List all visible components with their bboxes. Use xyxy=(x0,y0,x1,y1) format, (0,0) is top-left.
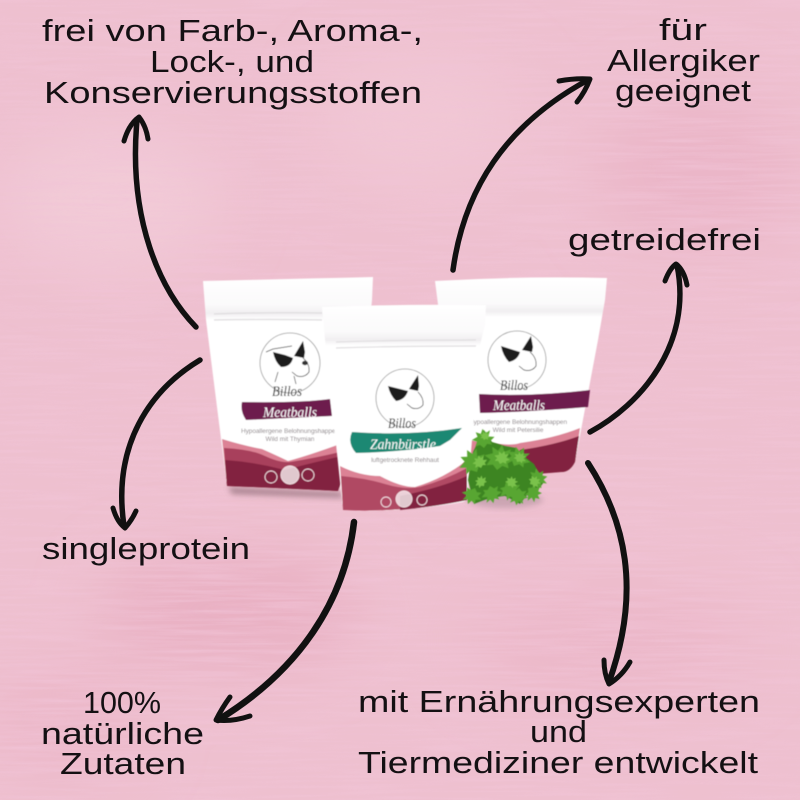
bottom colour band xyxy=(222,439,343,491)
text: frei von Farb-, Aroma-, Lock-, und Konservierungsstoffen: frei von Farb-, Aroma-, xyxy=(42,13,423,48)
text: mit Ernährungsexperten und Tiermediziner entwickelt: mit Ernährungsexperten xyxy=(358,684,760,719)
arrow: to 100% natürliche Zutaten xyxy=(216,522,354,720)
arrow: to getreidefrei xyxy=(590,264,687,432)
logo: dog in circle xyxy=(376,369,434,432)
text: mit Ernährungsexperten und Tiermediziner entwickelt: und xyxy=(530,714,587,749)
text: mit Ernährungsexperten und Tiermediziner entwickelt: Tiermediziner entwickelt xyxy=(358,745,758,780)
logo: dog in circle: Billos xyxy=(500,378,528,394)
text: frei von Farb-, Aroma-, Lock-, und Konservierungsstoffen xyxy=(42,13,423,110)
product description xyxy=(241,428,339,443)
benefit icons xyxy=(381,491,427,507)
product description: Hypoallergene Belohnungshappen xyxy=(469,419,567,426)
text: 100% natürliche Zutaten: 100% xyxy=(83,685,161,720)
text: 100% natürliche Zutaten: natürliche xyxy=(41,716,204,751)
product description: luftgetrocknete Rehhaut xyxy=(371,457,439,464)
logo: dog in circle xyxy=(260,333,320,400)
product description: Hypoallergene Belohnungshappen xyxy=(241,428,339,435)
text: 100% natürliche Zutaten: Zutaten xyxy=(60,746,186,781)
arrow: to frei von Farb-, Aroma- xyxy=(124,117,196,327)
text: für Allergiker geeignet: geeignet xyxy=(615,73,751,108)
text: frei von Farb-, Aroma-, Lock-, und Konservierungsstoffen: Konservierungsstoffen xyxy=(44,75,422,110)
label band: Zahnbürstle: Zahnbürstle xyxy=(370,437,436,453)
arrow: to Ernährungsexperten xyxy=(588,463,630,684)
text: singleprotein: singleprotein xyxy=(42,531,250,566)
arrow: to singleprotein xyxy=(113,360,200,528)
pouch: Meatballs Wild mit Petersilie (right) xyxy=(435,277,607,478)
text: für Allergiker geeignet xyxy=(607,12,760,108)
product description xyxy=(469,419,567,434)
pouch: Zahnbürstle (centre) xyxy=(322,305,486,511)
label band: Zahnbürstle xyxy=(350,428,462,453)
text: für Allergiker geeignet: Allergiker xyxy=(607,43,760,78)
pouch: Meatballs Wild mit Thymian (left) xyxy=(203,277,373,498)
label band: Meatballs xyxy=(242,399,332,421)
product description: Wild mit Petersilie xyxy=(493,427,544,434)
arrow: to für Allergiker geeignet xyxy=(453,79,590,270)
logo: dog in circle: Billos xyxy=(388,416,416,432)
text: getreidefrei: getreidefrei xyxy=(568,222,761,257)
benefit icons xyxy=(265,466,314,484)
bottom colour band xyxy=(340,460,467,511)
label band: Meatballs: Meatballs xyxy=(492,398,545,414)
text: mit Ernährungsexperten und Tiermediziner entwickelt xyxy=(358,684,760,780)
logo: dog in circle xyxy=(488,331,546,394)
label band: Meatballs xyxy=(479,390,590,414)
parsley sprig xyxy=(454,427,550,508)
text: frei von Farb-, Aroma-, Lock-, und Konservierungsstoffen: Lock-, und xyxy=(150,44,314,79)
product group: three pouches with parsley xyxy=(203,277,607,511)
label band: Meatballs: Meatballs xyxy=(262,405,317,421)
text: 100% natürliche Zutaten xyxy=(41,685,204,781)
logo: dog in circle: Billos xyxy=(272,384,302,400)
product description: Wild mit Thymian xyxy=(266,436,315,443)
text: für Allergiker geeignet: für xyxy=(659,12,707,47)
